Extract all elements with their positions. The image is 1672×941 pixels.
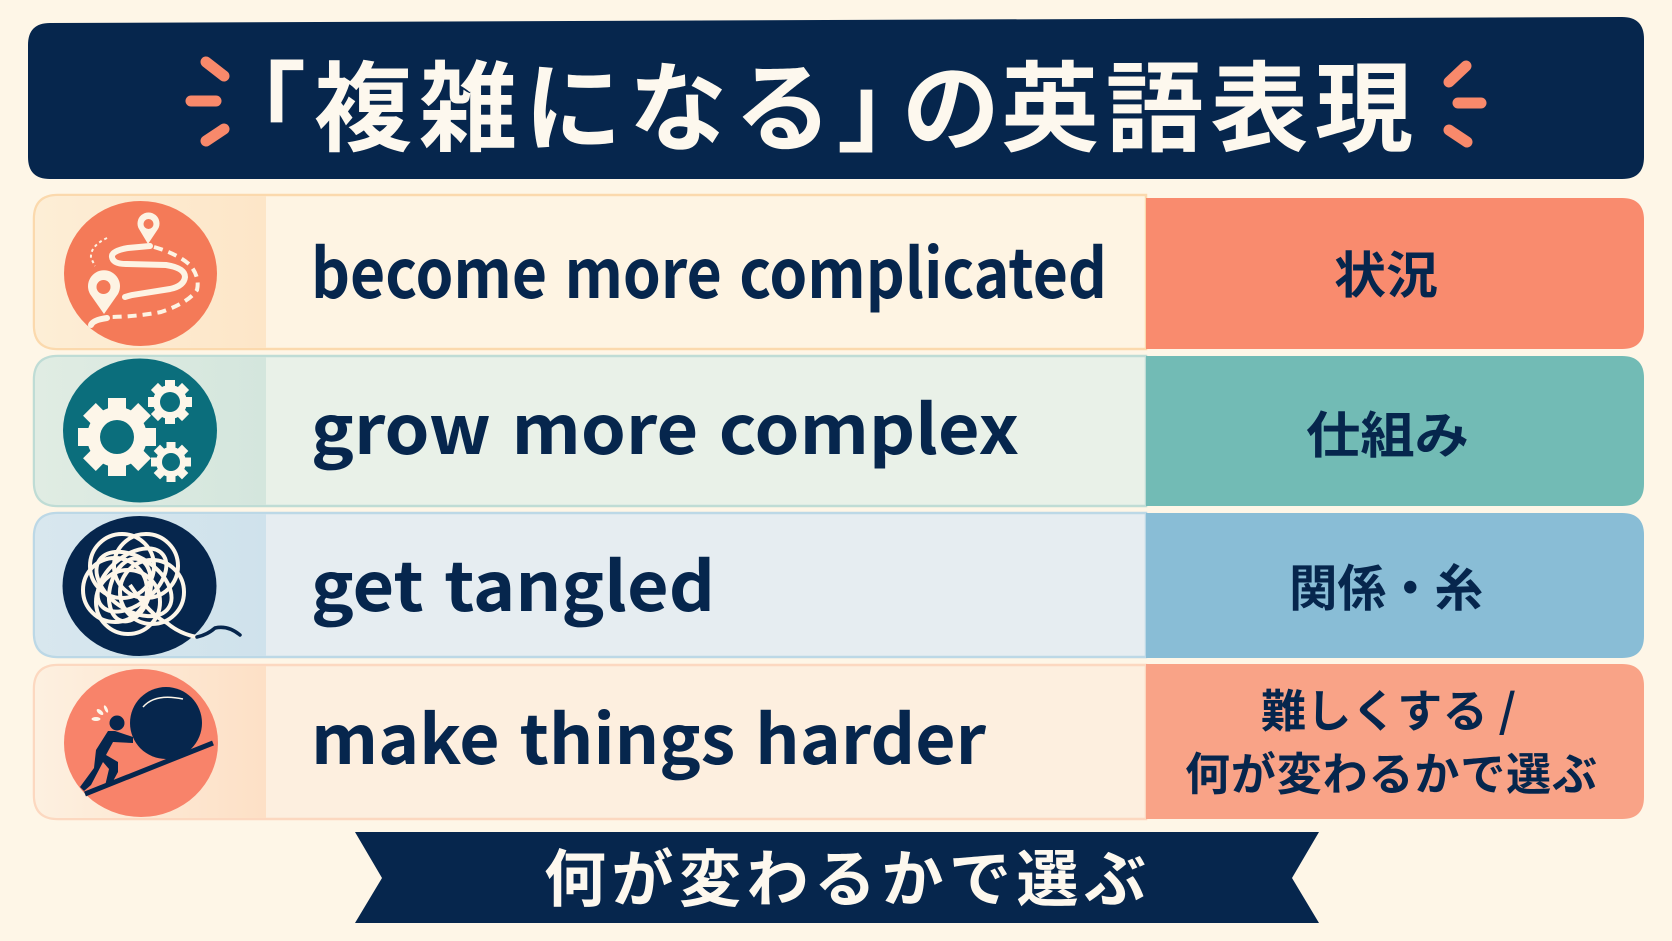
icon: left sparks xyxy=(191,62,224,141)
right cell: make harder, choose by what changes: 何が変わるかで選ぶ xyxy=(1185,738,1597,803)
header banner xyxy=(28,17,1644,179)
row 2: grow more complex xyxy=(34,356,1644,506)
row 4: make things harder xyxy=(34,664,1644,819)
title: 」 xyxy=(837,30,935,172)
expression text: make things harder xyxy=(311,685,986,784)
icon: right sparks xyxy=(1449,66,1481,142)
title: 複雑になる xyxy=(314,30,832,172)
expression text: get tangled xyxy=(311,532,715,631)
expression text: become more complicated xyxy=(311,219,1107,318)
title: 英語表現 xyxy=(1001,30,1413,172)
right cell: situation: 状況 xyxy=(1334,236,1438,308)
title xyxy=(208,30,1413,172)
icon: gears xyxy=(63,358,217,502)
right cell: mechanism xyxy=(1146,356,1644,506)
right cell: make harder, choose by what changes xyxy=(1146,664,1644,819)
right cell: relationships and threads xyxy=(1146,513,1644,658)
icon: winding route xyxy=(64,201,217,346)
right cell: make harder, choose by what changes: 難しくする / xyxy=(1261,675,1516,740)
expression text: grow more complex xyxy=(311,375,1019,474)
right cell: situation xyxy=(1146,198,1644,349)
row 3: get tangled xyxy=(34,513,1644,658)
title: の xyxy=(902,30,1000,172)
right cell: mechanism: 仕組み xyxy=(1306,396,1469,468)
icon: tangled thread xyxy=(62,516,240,656)
ribbon text: 何が変わるかで選ぶ xyxy=(544,829,1146,919)
row 1: become more complicated xyxy=(34,195,1644,349)
icon: person pushing boulder uphill xyxy=(64,669,218,817)
bottom ribbon xyxy=(355,829,1319,923)
title: 「 xyxy=(208,30,306,172)
right cell: relationships and threads: 関係・糸 xyxy=(1289,549,1483,621)
